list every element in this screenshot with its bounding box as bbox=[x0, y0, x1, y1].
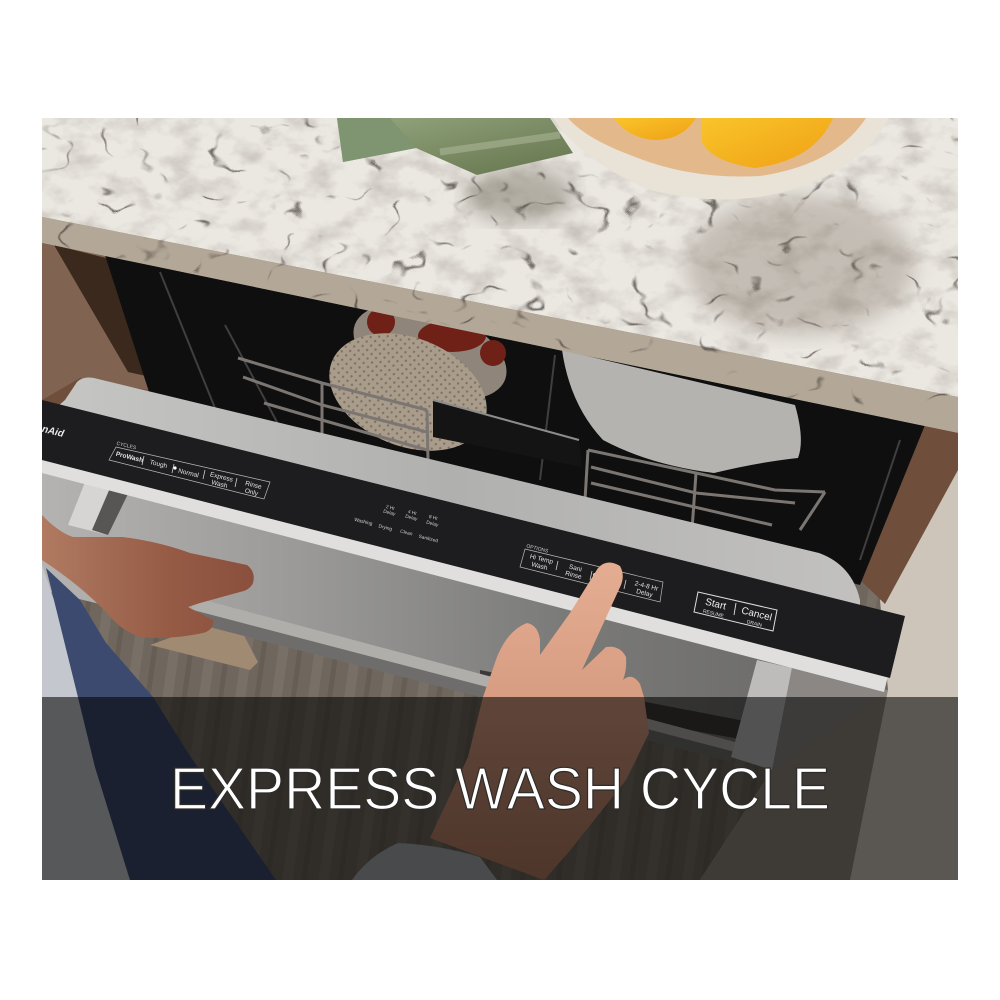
options buttons: Wash bbox=[531, 561, 549, 572]
status indicators: 8 Hr bbox=[428, 514, 439, 522]
start and cancel buttons: RESUME bbox=[702, 609, 725, 620]
hinge right bbox=[731, 660, 792, 770]
left arm and hand bbox=[42, 515, 254, 638]
bowl and napkin shadows bbox=[685, 195, 915, 335]
sleeve right bbox=[352, 843, 497, 880]
cycles buttons bbox=[115, 451, 263, 498]
status indicators: 4 Hr bbox=[407, 509, 418, 517]
shirt bbox=[42, 565, 130, 880]
status indicators: Delay bbox=[383, 509, 397, 518]
options label: OPTIONS bbox=[526, 543, 550, 555]
black control panel bbox=[42, 400, 905, 678]
cycles buttons: Express bbox=[209, 471, 234, 484]
lemon right bbox=[702, 118, 833, 168]
status indicators: Sanitized bbox=[418, 534, 439, 544]
bowl inside bbox=[568, 118, 866, 177]
status indicators: Clean bbox=[399, 529, 413, 538]
cycles buttons: Tough bbox=[149, 459, 168, 470]
white trim strip bbox=[42, 458, 888, 692]
cycles buttons: ProWash bbox=[115, 451, 144, 464]
lemon left bbox=[614, 118, 696, 140]
bowl with lemons bbox=[553, 118, 889, 199]
wood cabinet right bbox=[858, 425, 958, 604]
cycles button box bbox=[109, 447, 270, 499]
start and cancel buttons: Start bbox=[704, 597, 727, 613]
bowl rim bbox=[553, 118, 889, 199]
options button box bbox=[520, 549, 663, 602]
dishwasher door bbox=[42, 378, 905, 770]
hinge left bbox=[68, 482, 128, 535]
white bowl bbox=[562, 350, 801, 473]
start and cancel buttons bbox=[694, 592, 777, 631]
dish rack contents bbox=[160, 272, 900, 560]
cycles label: CYCLES bbox=[116, 441, 137, 452]
interior wires bbox=[160, 272, 900, 560]
options buttons: 2-4-8 Hr bbox=[634, 580, 660, 593]
red dish details bbox=[367, 312, 395, 334]
cycles buttons: Rinse bbox=[244, 480, 263, 491]
status indicators: Delay bbox=[426, 520, 440, 529]
start and cancel buttons: DRAIN bbox=[746, 619, 763, 629]
denim apron bbox=[46, 568, 276, 880]
options buttons: Delay bbox=[635, 588, 654, 599]
wood cabinet left bbox=[42, 243, 148, 400]
status indicators bbox=[354, 504, 440, 544]
caption band bbox=[42, 697, 958, 880]
right hand pointing bbox=[430, 562, 649, 880]
status indicators: Drying bbox=[378, 523, 393, 533]
cycles buttons: Only bbox=[244, 488, 259, 498]
door top lip bbox=[60, 378, 860, 605]
striped plate bbox=[354, 310, 506, 396]
napkin bbox=[337, 118, 573, 175]
cycles buttons: Normal bbox=[177, 468, 200, 480]
stainless front bbox=[42, 473, 888, 740]
granite veins bbox=[42, 118, 958, 434]
status indicators: Washing bbox=[354, 517, 373, 527]
status indicators: 2 Hr bbox=[385, 504, 396, 512]
photo: dishwasher scene bbox=[11, 118, 958, 880]
rack handle bbox=[433, 401, 547, 460]
cycles buttons: Wash bbox=[211, 479, 229, 490]
status indicators: Delay bbox=[405, 514, 419, 523]
dark floor by the door bbox=[700, 690, 888, 880]
counter front edge bbox=[42, 217, 958, 433]
light floor at right bbox=[700, 450, 958, 880]
floor reflection region below handle bbox=[244, 636, 431, 684]
door dark slot bbox=[480, 670, 750, 740]
countertop bbox=[42, 118, 958, 434]
dishwasher interior bbox=[104, 252, 925, 585]
options buttons: Sani bbox=[568, 564, 583, 574]
logo: KitchenAid bbox=[11, 416, 66, 440]
granite blotches bbox=[42, 118, 958, 434]
options buttons: Hi Temp bbox=[529, 553, 554, 566]
floor bbox=[52, 582, 888, 880]
counter top surface bbox=[42, 118, 958, 397]
scene base bbox=[42, 217, 958, 404]
tan floor piece bbox=[150, 625, 258, 670]
patterned plate bbox=[329, 333, 487, 451]
rack wires bbox=[238, 358, 825, 530]
options buttons bbox=[529, 553, 660, 599]
start and cancel buttons: Cancel bbox=[740, 605, 773, 624]
door side right bbox=[772, 668, 888, 770]
door handle bbox=[190, 597, 735, 760]
title: EXPRESS WASH CYCLE bbox=[170, 756, 830, 822]
options buttons: Rinse bbox=[564, 570, 583, 581]
